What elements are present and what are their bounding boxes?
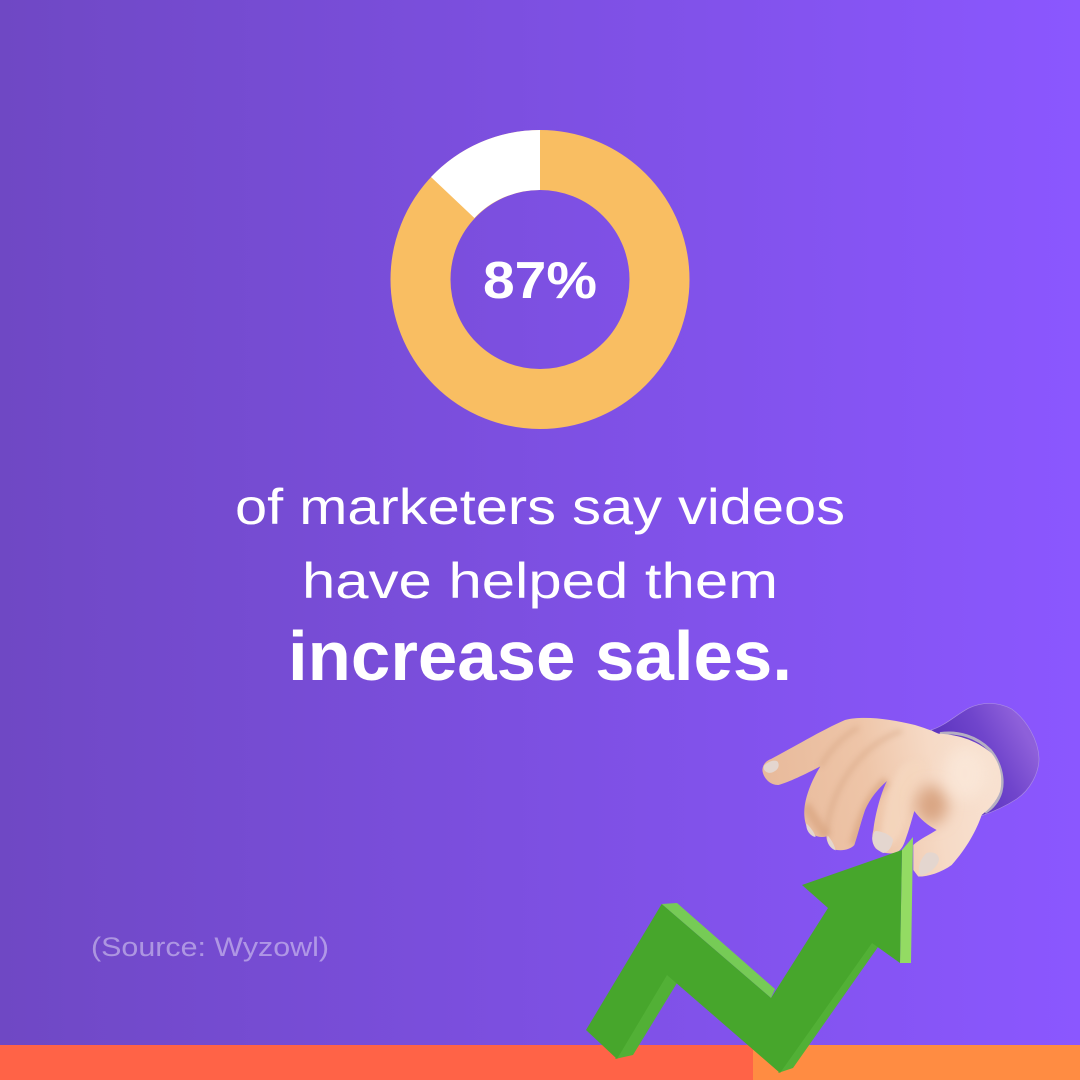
- arrow top side face: [662, 903, 775, 998]
- statement text: [235, 479, 845, 695]
- statement line 2: have helped them: [302, 553, 778, 609]
- donut value: 87%: [483, 252, 597, 310]
- arrow front face: [586, 850, 902, 1073]
- donut remainder: 13% segment: [431, 130, 540, 218]
- skin fill: [762, 718, 1002, 876]
- donut track: 87% segment: [420, 160, 660, 399]
- icon: growth arrow: [586, 837, 913, 1073]
- hand base: [762, 718, 1002, 876]
- icon: hand with cuff: [755, 703, 1039, 882]
- fingernails: [764, 761, 939, 876]
- pinching finger highlight: [882, 784, 902, 841]
- donut chart: 87%: [420, 130, 660, 399]
- hand highlight: [944, 753, 980, 796]
- ring finger shadow: [805, 781, 887, 845]
- statement emphasis: increase sales.: [288, 617, 792, 695]
- bottom colour bar: [0, 1045, 1080, 1080]
- statement line 1: of marketers say videos: [235, 479, 845, 535]
- palm shadow: [916, 786, 948, 824]
- arrow lower side faces: [615, 940, 878, 1073]
- source note: (Source: Wyzowl): [91, 932, 329, 962]
- shirt cuff stripe: [940, 733, 1002, 812]
- finger separation shadows: [820, 728, 902, 836]
- illustration: hand lifting growth arrow: [586, 703, 1039, 1073]
- shirt cuff: [931, 703, 1039, 816]
- arrow head side face: [900, 837, 913, 963]
